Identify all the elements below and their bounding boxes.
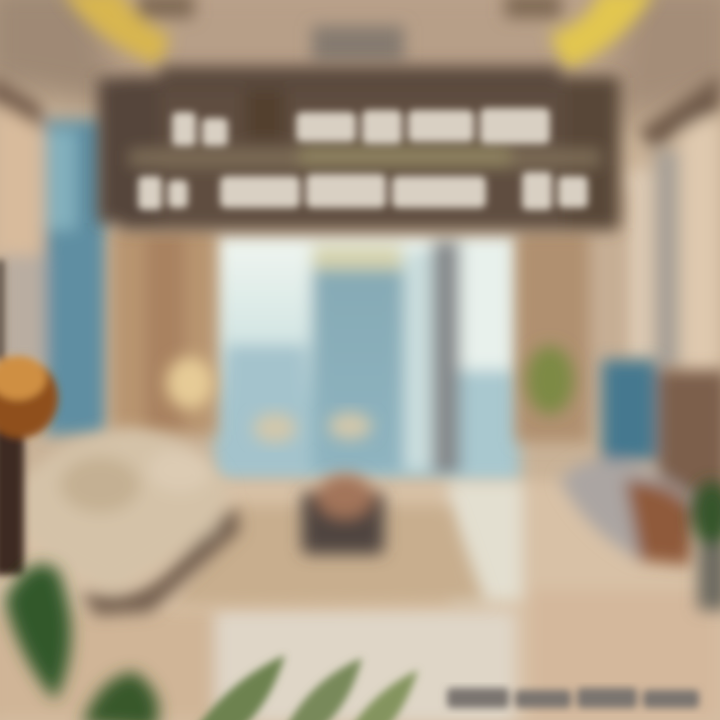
left wall panels (0, 75, 106, 435)
ceiling (0, 0, 720, 125)
blurred caption text (447, 688, 699, 708)
right potted plant (526, 346, 720, 610)
coffee table (302, 474, 384, 554)
blue column (46, 120, 106, 435)
wall lamp glow (166, 357, 214, 409)
ceiling lights (62, 0, 655, 70)
window with skyline (214, 236, 520, 484)
pale foreground fronds (195, 655, 418, 720)
floor (0, 480, 720, 720)
headline line one (172, 108, 550, 146)
foreground plants (5, 564, 159, 720)
wooden pillars (105, 228, 627, 450)
right wall panels (624, 74, 720, 373)
headline beam (98, 66, 620, 230)
rug (175, 505, 485, 605)
sofa (25, 428, 240, 615)
headline line two (138, 172, 588, 210)
blurred headline text (138, 108, 588, 210)
centre flower decoration (253, 412, 372, 443)
right furniture (560, 360, 720, 565)
left lamp (0, 260, 58, 575)
